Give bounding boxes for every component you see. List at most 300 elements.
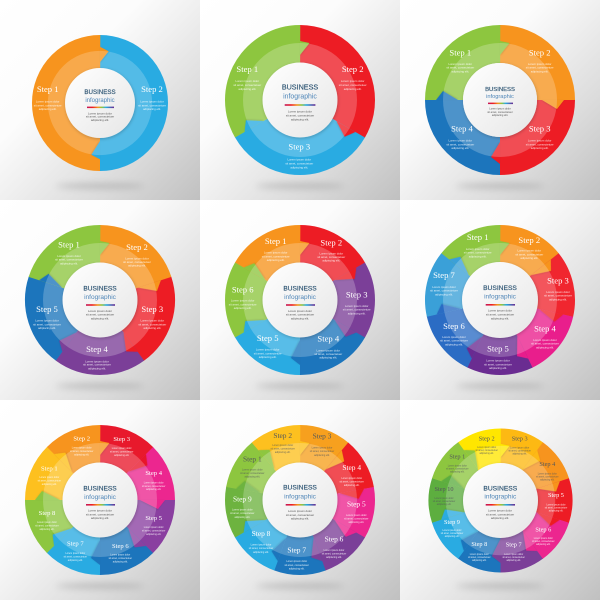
step 2: Lorem ipsum dolor xyxy=(518,249,541,253)
panel background xyxy=(400,400,600,600)
step 1 xyxy=(240,454,265,479)
center title xyxy=(283,485,317,521)
step 1 xyxy=(446,453,469,474)
step 5 xyxy=(142,515,166,536)
panel: 9 steps xyxy=(200,400,400,600)
step 5: Step 5 xyxy=(36,304,58,314)
step 7: adipiscing elit. xyxy=(506,559,521,562)
step 1: Step 1 xyxy=(449,453,465,460)
center title: sit amet, consectetuer xyxy=(86,115,114,119)
ground shadow xyxy=(56,583,144,589)
step 4: Step 4 xyxy=(534,324,557,334)
panel: 7 steps xyxy=(400,200,600,400)
step 2: sit amet, consectetuer xyxy=(70,450,94,453)
step 3: sit amet, consectetuer xyxy=(343,308,371,312)
step 3: Lorem ipsum dolor xyxy=(312,446,333,450)
step 1: Lorem ipsum dolor xyxy=(448,465,467,468)
step 8 xyxy=(468,541,491,562)
step 2: Step 2 xyxy=(73,436,90,442)
step 8: Lorem ipsum dolor xyxy=(470,553,489,556)
step 6: adipiscing elit. xyxy=(326,556,342,559)
step 3 xyxy=(110,436,134,457)
step 5: Step 5 xyxy=(347,500,366,508)
step 8 xyxy=(35,510,59,531)
step 2: sit amet, consectetuer xyxy=(138,103,166,107)
step 10: Lorem ipsum dolor xyxy=(434,497,454,500)
center title: infographic xyxy=(484,494,517,501)
step 2 xyxy=(138,84,166,111)
ring: 5 segments xyxy=(22,222,178,378)
step 7: Step 7 xyxy=(287,546,306,554)
ground shadow xyxy=(256,383,344,389)
step 5: Lorem ipsum dolor xyxy=(546,504,566,507)
panel background xyxy=(200,200,400,400)
center title: BUSINESS xyxy=(483,485,518,492)
step 6: Lorem ipsum dolor xyxy=(324,549,345,552)
step 6 xyxy=(229,285,257,310)
step 7: Step 7 xyxy=(506,541,522,548)
step 5: Lorem ipsum dolor xyxy=(346,514,367,517)
step 4 xyxy=(446,124,474,150)
center title xyxy=(483,285,517,321)
step 1 xyxy=(34,84,62,111)
step 4: adipiscing elit. xyxy=(146,488,162,491)
ground shadow xyxy=(256,583,344,589)
step 1: Lorem ipsum dolor xyxy=(466,247,490,251)
center title xyxy=(485,87,515,117)
step 3 xyxy=(508,435,531,456)
step 1: sit amet, consectetuer xyxy=(55,258,83,262)
step 7 xyxy=(430,270,458,296)
step 1: Lorem ipsum dolor xyxy=(236,79,259,83)
step 7 xyxy=(502,541,525,562)
panel: 2 steps xyxy=(0,0,200,200)
step 1: adipiscing elit. xyxy=(238,87,256,91)
center circle xyxy=(463,63,537,137)
center title: adipiscing elit. xyxy=(91,118,109,122)
step 7: Step 7 xyxy=(433,270,456,280)
step 3: Lorem ipsum dolor xyxy=(510,447,529,450)
center title xyxy=(83,486,117,520)
step 3 xyxy=(285,142,313,170)
ground shadow xyxy=(456,383,544,389)
step 4 xyxy=(142,470,166,491)
step 1: sit amet, consectetuer xyxy=(446,66,474,70)
step 1: Step 1 xyxy=(467,232,489,242)
panel background xyxy=(0,400,200,600)
step 3: Lorem ipsum dolor xyxy=(345,304,369,308)
step 5: adipiscing elit. xyxy=(348,521,364,524)
step 6: Lorem ipsum dolor xyxy=(534,537,553,540)
center title xyxy=(282,83,318,121)
step 1 xyxy=(464,232,492,258)
step 5: Lorem ipsum dolor xyxy=(486,359,510,363)
step 3: adipiscing elit. xyxy=(348,311,366,315)
step 1: Step 1 xyxy=(58,239,80,249)
step 8: adipiscing elit. xyxy=(39,528,55,531)
step 8 xyxy=(249,529,273,554)
step 3: Lorem ipsum dolor xyxy=(288,157,311,161)
step 4: sit amet, consectetuer xyxy=(314,352,342,356)
step 5: adipiscing elit. xyxy=(549,510,564,513)
step 7 xyxy=(284,546,309,570)
step 1 xyxy=(233,64,261,91)
step 2 xyxy=(475,435,498,455)
step 2: Lorem ipsum dolor xyxy=(125,256,149,260)
step 6: Lorem ipsum dolor xyxy=(442,335,466,339)
step 5 xyxy=(254,333,282,359)
step 2: Step 2 xyxy=(518,235,540,245)
step 6: Step 6 xyxy=(325,534,344,544)
panel: 4 steps xyxy=(400,0,600,200)
step 6: Step 6 xyxy=(443,321,466,331)
center title xyxy=(84,89,116,122)
panel background xyxy=(400,200,600,400)
center title: sit amet, consectetuer xyxy=(286,513,314,517)
center title: Lorem ipsum dolor xyxy=(488,509,512,513)
step 2: Lorem ipsum dolor xyxy=(72,446,92,450)
panel: 3 steps xyxy=(200,0,400,200)
center title: infographic xyxy=(486,94,514,100)
step 2: adipiscing elit. xyxy=(322,259,340,263)
step 4: sit amet, consectetuer xyxy=(446,142,474,146)
ground shadow xyxy=(256,183,344,189)
center title: infographic xyxy=(284,494,317,501)
step 6: sit amet, consectetuer xyxy=(440,339,468,343)
step 5: adipiscing elit. xyxy=(489,366,507,370)
step 1: adipiscing elit. xyxy=(39,107,57,111)
step 8: adipiscing elit. xyxy=(472,559,487,562)
ground shadow xyxy=(56,383,144,389)
step 2: adipiscing elit. xyxy=(74,454,90,457)
step 6: sit amet, consectetuer xyxy=(229,302,257,306)
step 4 xyxy=(536,461,559,482)
step 4: Step 4 xyxy=(451,124,474,134)
step 3: Step 3 xyxy=(512,435,528,442)
step 2 xyxy=(526,48,554,73)
step 3: sit amet, consectetuer xyxy=(508,450,531,453)
step 4: Lorem ipsum dolor xyxy=(538,473,557,476)
center title: infographic xyxy=(484,294,517,301)
step 3: sit amet, consectetuer xyxy=(526,142,554,146)
step 6: Lorem ipsum dolor xyxy=(110,554,130,556)
center title: adipiscing elit. xyxy=(491,317,509,321)
step 6: Step 6 xyxy=(535,526,551,533)
step 2 xyxy=(339,64,367,91)
step 2: Step 2 xyxy=(273,431,292,440)
step 4: sit amet, consectetuer xyxy=(536,476,559,479)
panel: 5 steps xyxy=(0,200,200,400)
center title: adipiscing elit. xyxy=(491,516,509,520)
step 1: Lorem ipsum dolor xyxy=(242,468,263,472)
step 3: Lorem ipsum dolor xyxy=(546,290,570,294)
step 8: Step 8 xyxy=(39,510,56,517)
step 1: sit amet, consectetuer xyxy=(34,103,62,107)
step 4: Lorem ipsum dolor xyxy=(533,338,557,342)
center title: sit amet, consectetuer xyxy=(486,512,514,516)
step 4: sit amet, consectetuer xyxy=(83,363,111,367)
center title: adipiscing elit. xyxy=(291,117,309,121)
panel: 10 steps xyxy=(400,400,600,600)
step 7: adipiscing elit. xyxy=(68,559,83,562)
center title: sit amet, consectetuer xyxy=(86,313,114,317)
step 1: adipiscing elit. xyxy=(60,261,78,265)
step 9 xyxy=(441,519,463,538)
step 4 xyxy=(339,463,364,487)
step 2: Step 2 xyxy=(479,435,495,442)
step 9: Lorem ipsum dolor xyxy=(442,529,462,532)
center title: sit amet, consectetuer xyxy=(286,313,314,317)
step 1: Step 1 xyxy=(41,466,58,472)
step 1: adipiscing elit. xyxy=(267,258,285,262)
step 10: adipiscing elit. xyxy=(437,503,452,506)
step 9: sit amet, consectetuer xyxy=(230,512,255,515)
step 3: adipiscing elit. xyxy=(143,326,161,330)
step 3 xyxy=(310,432,334,457)
step 2: Step 2 xyxy=(529,48,551,58)
step 9: adipiscing elit. xyxy=(234,516,250,519)
step 6: adipiscing elit. xyxy=(445,342,463,346)
step 1: adipiscing elit. xyxy=(450,471,465,474)
step 1: Step 1 xyxy=(449,48,471,58)
step 4: adipiscing elit. xyxy=(540,479,555,482)
step 6: sit amet, consectetuer xyxy=(532,540,555,543)
center circle xyxy=(262,462,338,538)
step 2: sit amet, consectetuer xyxy=(475,449,498,452)
step 5 xyxy=(33,304,61,330)
step 2: adipiscing elit. xyxy=(531,69,549,73)
step 5: sit amet, consectetuer xyxy=(254,351,282,355)
step 2: Step 2 xyxy=(320,238,342,248)
step 5: sit amet, consectetuer xyxy=(344,518,369,520)
center title: BUSINESS xyxy=(84,89,116,96)
step 10 xyxy=(433,486,455,506)
ring: 7 segments xyxy=(421,221,579,379)
step 2: sit amet, consectetuer xyxy=(270,448,295,450)
step 2: adipiscing elit. xyxy=(128,264,146,268)
step 1: Lorem ipsum dolor xyxy=(264,251,288,255)
step 8: Step 8 xyxy=(252,529,271,538)
step 4 xyxy=(531,324,559,349)
ground shadow xyxy=(456,183,544,189)
step 6 xyxy=(322,534,346,559)
step 8: Lorem ipsum dolor xyxy=(251,544,272,546)
step 3 xyxy=(343,289,371,315)
ring: 8 segments xyxy=(21,421,179,579)
step 3: sit amet, consectetuer xyxy=(285,161,313,165)
step 2: Lorem ipsum dolor xyxy=(477,446,496,449)
step 5: sit amet, consectetuer xyxy=(545,507,567,510)
step 4: sit amet, consectetuer xyxy=(142,485,166,488)
center title: Lorem ipsum dolor xyxy=(288,509,312,513)
center title xyxy=(483,485,518,520)
center title xyxy=(283,286,317,320)
step 3: adipiscing elit. xyxy=(549,297,567,301)
step 7: sit amet, consectetuer xyxy=(430,289,458,293)
step 7: sit amet, consectetuer xyxy=(64,555,87,558)
panel background xyxy=(0,200,200,400)
step 3: adipiscing elit. xyxy=(314,454,330,457)
step 2: Lorem ipsum dolor xyxy=(272,444,293,447)
center title: infographic xyxy=(284,294,317,301)
step 2 xyxy=(270,431,295,454)
step 6: sit amet, consectetuer xyxy=(109,557,132,560)
step 1: sit amet, consectetuer xyxy=(38,479,61,482)
step 2: adipiscing elit. xyxy=(143,107,161,111)
step 4: adipiscing elit. xyxy=(88,366,106,370)
step 1 xyxy=(262,236,290,262)
step 5: adipiscing elit. xyxy=(259,355,277,359)
step 7: adipiscing elit. xyxy=(435,292,453,296)
step 2: adipiscing elit. xyxy=(344,87,362,91)
step 2: adipiscing elit. xyxy=(520,256,538,260)
step 3: Lorem ipsum dolor xyxy=(112,447,132,450)
step 1: Lorem ipsum dolor xyxy=(57,254,81,258)
step 9: Step 9 xyxy=(444,519,460,526)
center title: adipiscing elit. xyxy=(291,316,309,320)
center title: sit amet, consectetuer xyxy=(487,110,513,114)
center title: Lorem ipsum dolor xyxy=(288,309,312,313)
step 3: Step 3 xyxy=(547,275,569,285)
step 2: Step 2 xyxy=(126,242,148,252)
step 4 xyxy=(83,344,111,370)
step 1 xyxy=(446,48,474,73)
step 4: Step 4 xyxy=(86,344,109,354)
step 2: sit amet, consectetuer xyxy=(317,255,345,259)
step 1: sit amet, consectetuer xyxy=(240,472,265,475)
step 1: adipiscing elit. xyxy=(244,476,260,479)
step 4: adipiscing elit. xyxy=(536,345,554,349)
step 6: adipiscing elit. xyxy=(536,543,551,546)
step 6: sit amet, consectetuer xyxy=(322,552,346,556)
panel: 8 steps xyxy=(0,400,200,600)
step 6: Lorem ipsum dolor xyxy=(231,299,255,303)
step 2: Lorem ipsum dolor xyxy=(341,79,365,83)
step 4: adipiscing elit. xyxy=(451,146,469,150)
step 5: Lorem ipsum dolor xyxy=(144,526,164,529)
step 2: Lorem ipsum dolor xyxy=(320,251,343,255)
center title: sit amet, consectetuer xyxy=(86,512,114,516)
center title: infographic xyxy=(84,294,117,301)
center title: Lorem ipsum dolor xyxy=(288,109,312,113)
step 7: sit amet, consectetuer xyxy=(502,556,525,559)
step 2: sit amet, consectetuer xyxy=(123,260,151,264)
step 4: Step 4 xyxy=(317,334,340,344)
step 6 xyxy=(440,321,468,346)
step 4: sit amet, consectetuer xyxy=(531,342,559,346)
panel background xyxy=(400,0,600,200)
step 3 xyxy=(138,304,166,330)
step 4: adipiscing elit. xyxy=(344,484,360,487)
center title: BUSINESS xyxy=(282,83,318,92)
step 1: Lorem ipsum dolor xyxy=(39,476,59,479)
step 3: Step 3 xyxy=(313,432,332,440)
panel: 6 steps xyxy=(200,200,400,400)
step 1: Step 1 xyxy=(37,84,59,94)
step 3: Step 3 xyxy=(113,436,131,443)
step 4: Step 4 xyxy=(145,470,163,477)
step 5 xyxy=(484,343,512,370)
step 1: Lorem ipsum dolor xyxy=(36,100,60,104)
step 7: Lorem ipsum dolor xyxy=(65,552,85,555)
step 4: sit amet, consectetuer xyxy=(339,480,364,484)
center circle xyxy=(463,463,538,538)
step 4: Lorem ipsum dolor xyxy=(341,477,362,480)
step 5: Step 5 xyxy=(257,333,279,343)
step 9: Lorem ipsum dolor xyxy=(232,508,253,512)
center title: BUSINESS xyxy=(83,486,117,493)
step 7: sit amet, consectetuer xyxy=(284,564,309,567)
center circle xyxy=(62,462,138,538)
step 2: adipiscing elit. xyxy=(479,452,494,455)
step 8: sit amet, consectetuer xyxy=(35,524,59,527)
center circle xyxy=(262,262,338,338)
ring: 4 segments xyxy=(436,41,564,164)
panel background xyxy=(200,400,400,600)
step 3: Step 3 xyxy=(141,304,163,314)
step 3: sit amet, consectetuer xyxy=(310,450,334,453)
step 1: adipiscing elit. xyxy=(42,483,57,486)
step 2: sit amet, consectetuer xyxy=(526,66,554,70)
step 1 xyxy=(38,466,61,486)
step 5: sit amet, consectetuer xyxy=(142,529,166,532)
step 2 xyxy=(123,242,151,268)
step 7: Lorem ipsum dolor xyxy=(504,553,523,556)
step 2: Lorem ipsum dolor xyxy=(528,62,552,66)
step 4: adipiscing elit. xyxy=(319,356,337,360)
center title: adipiscing elit. xyxy=(91,516,109,520)
step 7: Lorem ipsum dolor xyxy=(286,560,307,563)
center title: infographic xyxy=(283,93,317,100)
center title: Lorem ipsum dolor xyxy=(88,111,112,115)
step 3: adipiscing elit. xyxy=(531,146,549,150)
step 1: Step 1 xyxy=(243,454,262,464)
step 4: Lorem ipsum dolor xyxy=(449,139,472,143)
step 8: sit amet, consectetuer xyxy=(249,547,273,550)
step 6 xyxy=(532,526,555,546)
step 4: Lorem ipsum dolor xyxy=(317,348,340,352)
step 2: Lorem ipsum dolor xyxy=(140,100,164,104)
step 5: Lorem ipsum dolor xyxy=(35,319,59,323)
center circle xyxy=(65,68,135,138)
step 10: Step 10 xyxy=(434,486,454,493)
center title: BUSINESS xyxy=(83,286,117,293)
step 3: adipiscing elit. xyxy=(512,453,527,456)
step 5: adipiscing elit. xyxy=(146,533,162,536)
step 4: Step 4 xyxy=(342,463,361,472)
step 1: sit amet, consectetuer xyxy=(262,254,290,258)
center title: infographic xyxy=(85,98,115,104)
step 2 xyxy=(317,238,345,263)
step 2: adipiscing elit. xyxy=(275,451,291,454)
step 9: sit amet, consectetuer xyxy=(441,532,463,535)
step 9: Step 9 xyxy=(233,494,252,504)
step 3: Lorem ipsum dolor xyxy=(528,139,552,143)
step 1: sit amet, consectetuer xyxy=(464,251,492,255)
step 4 xyxy=(314,334,342,360)
step 1: adipiscing elit. xyxy=(469,254,487,258)
center title xyxy=(83,286,117,320)
ring: 2 segments xyxy=(49,47,151,159)
step 2: sit amet, consectetuer xyxy=(339,83,367,87)
step 8: Lorem ipsum dolor xyxy=(37,521,57,524)
step 8: Step 8 xyxy=(471,541,487,548)
ground shadow xyxy=(456,583,544,589)
ring: 3 segments xyxy=(224,24,376,176)
step 6: adipiscing elit. xyxy=(113,560,128,564)
step 5 xyxy=(344,500,369,524)
step 3: Step 3 xyxy=(529,124,551,134)
